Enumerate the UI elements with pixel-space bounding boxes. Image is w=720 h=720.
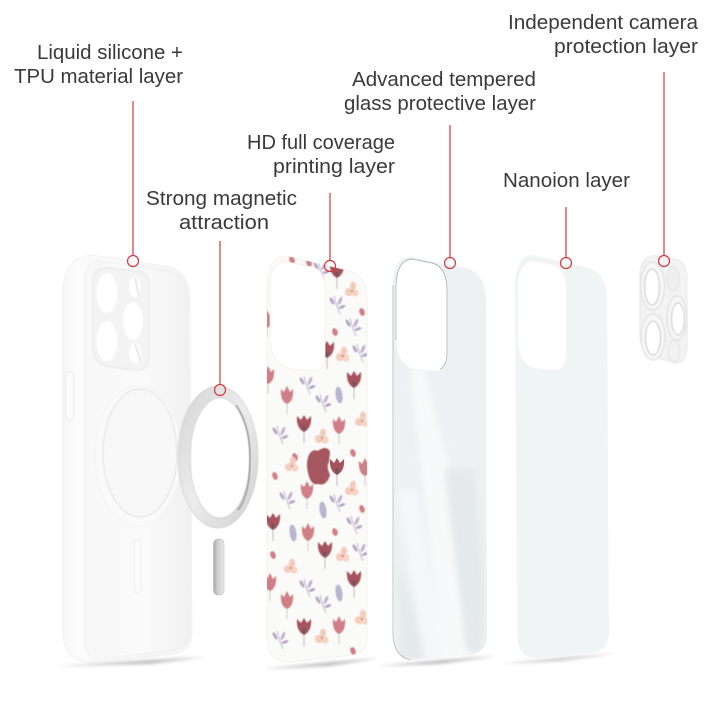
floral pattern [261,255,371,656]
panel: printed floral layer [266,256,374,670]
panel: silicone case layer [56,255,206,666]
leader line [565,207,567,258]
printed sheet [267,256,367,662]
leader marker [128,256,138,266]
callout: magnet [146,188,297,396]
callout: nanoion [503,170,630,268]
nanoion camera cutout [518,261,566,370]
label: protection layer: protection layer [554,36,698,58]
shadow under glass [378,656,498,666]
shadow under case [56,657,206,666]
leader marker [560,258,572,268]
flower over logo [330,458,344,486]
case body [63,255,192,662]
leader marker [324,260,336,272]
camera cutout [270,262,325,371]
callout: printing [247,132,395,272]
shadow under nanoion [498,653,620,664]
label: printing layer: printing layer [273,156,395,178]
alignment slot [134,539,141,593]
nanoion sheet [515,255,609,658]
shadow under printed layer [262,658,380,669]
panel: tempered glass layer [386,257,490,667]
leader marker [214,384,226,396]
label: nanoion: Nanoion layer [503,170,630,192]
panel: magnetic ring [178,386,258,595]
label: attraction: attraction [179,212,269,234]
protector frame [640,256,687,363]
leader line [449,125,451,258]
leader marker [444,258,456,268]
leader line [132,101,134,255]
leader line [663,72,665,255]
case inner tray [85,261,190,659]
glass cutout edge highlight [396,259,447,369]
panel: camera protector [640,256,687,363]
leader marker [658,256,670,266]
panel: nanoion layer [498,255,620,664]
metal ring [178,386,258,528]
label: independent camera: Independent camera [508,12,699,34]
glass sheet [393,257,487,660]
callout: glass [344,69,536,268]
glass reflections [402,372,479,657]
label: magnetic: Strong magnetic [146,188,297,210]
glass left edge [393,285,410,660]
callout: silicone [14,42,183,266]
metal bar [214,539,224,595]
leader line [219,241,221,385]
side button [66,372,74,420]
label: TPU layer: TPU material layer [14,66,183,88]
camera bump with lens holes [93,268,149,370]
callout: camera protection [508,12,699,266]
label: tempered: Advanced tempered [352,69,536,91]
leader line [329,193,331,260]
ring inner bevel [236,405,250,510]
label: glass layer: glass protective layer [344,93,536,115]
label: silicone layer: Liquid silicone + [37,42,183,64]
glass camera cutout [396,259,447,371]
protector lens rings [640,262,687,362]
label: HD coverage: HD full coverage [247,132,395,154]
apple logo [307,448,330,485]
magnetic circle recess [95,386,181,526]
